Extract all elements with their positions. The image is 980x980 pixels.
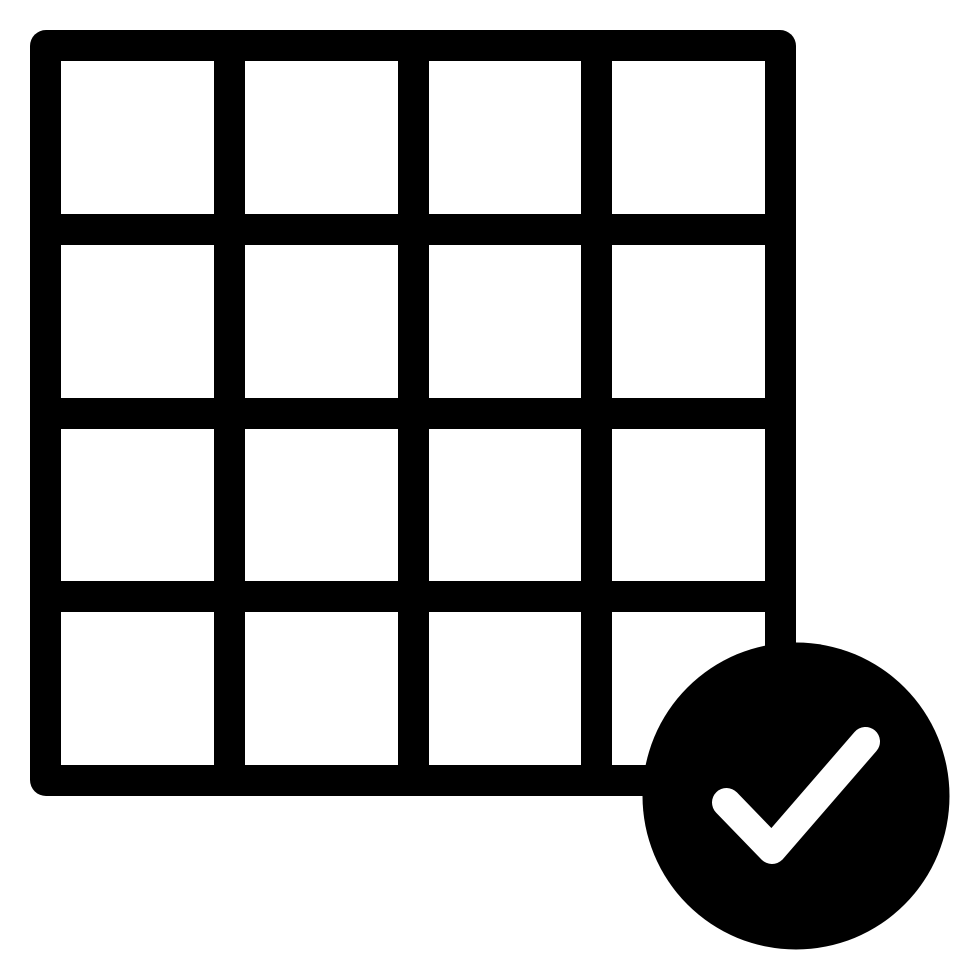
- grid table: [30, 30, 796, 796]
- check badge: [642, 642, 950, 950]
